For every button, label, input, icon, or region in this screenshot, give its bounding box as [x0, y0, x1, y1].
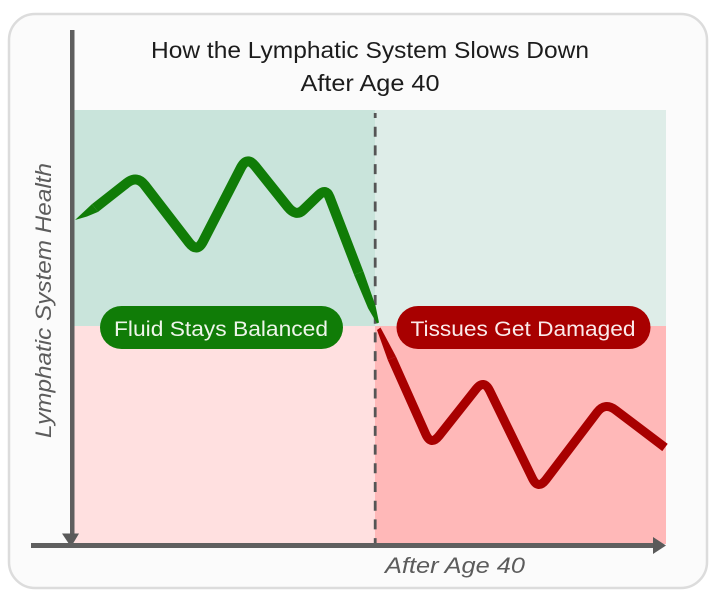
- dashed divider at age 40: [374, 113, 377, 544]
- y axis label: Lymphatic System Health: [31, 163, 56, 438]
- panel: chart quadrants: [74, 110, 666, 544]
- x axis with arrow: [31, 537, 666, 554]
- title: [151, 37, 589, 96]
- label: fluid stays balanced: Fluid Stays Balanced: [114, 317, 328, 341]
- title: How the Lymphatic System Slows Down: [151, 37, 589, 63]
- y axis with arrow: [62, 30, 79, 547]
- quadrant: bottom right: [375, 326, 666, 544]
- title: After Age 40: [300, 70, 440, 96]
- red decline line: [377, 328, 665, 485]
- quadrant: top left: [74, 110, 375, 326]
- x axis label: After Age 40: [383, 553, 526, 578]
- green health line: [75, 161, 379, 324]
- quadrant: bottom left: [74, 326, 375, 544]
- quadrant: top right: [375, 110, 666, 326]
- label: tissues get damaged: [396, 306, 650, 349]
- label: fluid stays balanced: [100, 306, 343, 349]
- label: tissues get damaged: Tissues Get Damaged: [410, 317, 636, 341]
